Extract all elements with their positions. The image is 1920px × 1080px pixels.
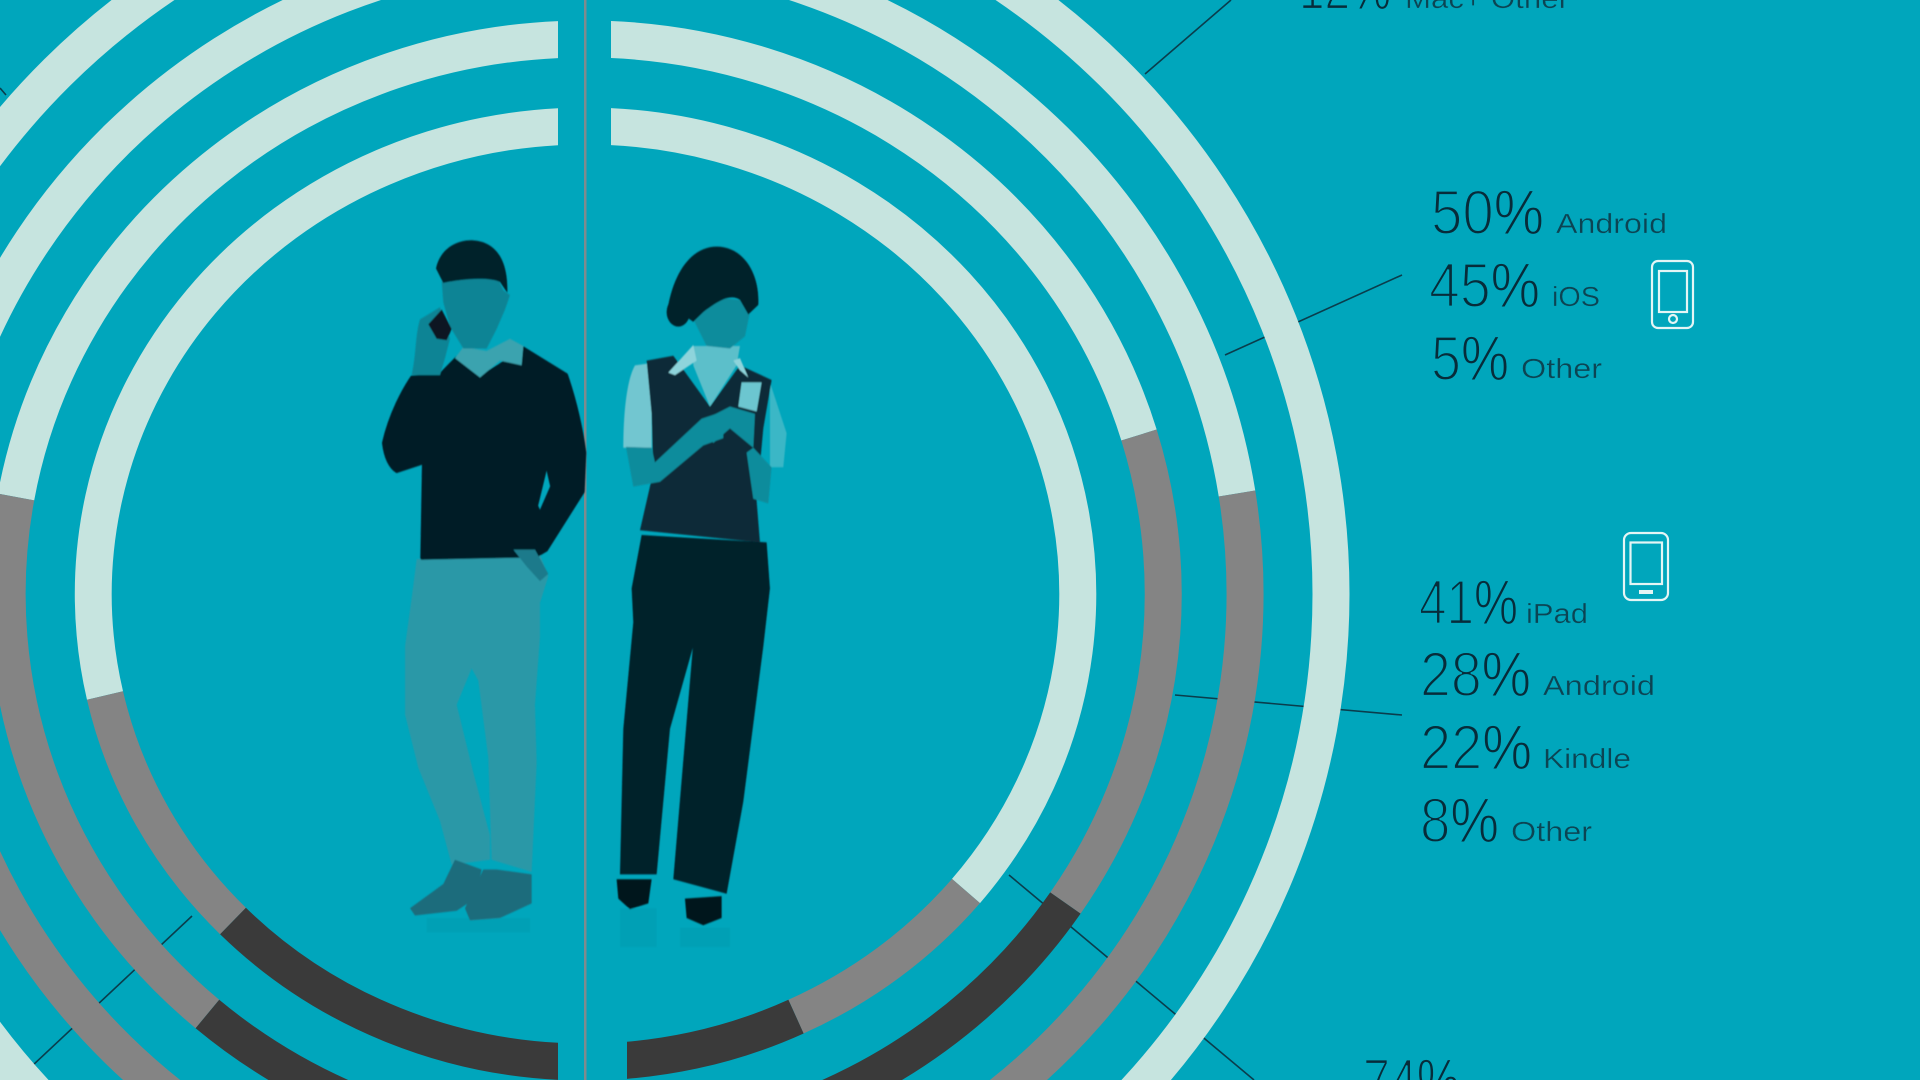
stat: iOS 45%: 45%	[1429, 251, 1540, 321]
stat: Kindle 22%: Kindle	[1543, 743, 1631, 774]
ring 1 left	[93, 126, 585, 1062]
man collar	[455, 339, 523, 378]
woman collar	[668, 345, 748, 378]
stat: Other 5%: 5%	[1431, 324, 1509, 394]
man jeans	[405, 554, 548, 872]
leader lines	[0, 0, 1402, 1080]
man shadow	[427, 918, 530, 933]
woman bun	[667, 298, 690, 327]
woman pants	[620, 535, 770, 894]
ring 4 left	[0, 0, 174, 1080]
stat: iPad 41%: 41%	[1419, 568, 1518, 638]
ring 3 left	[0, 0, 381, 1080]
ring 4 right	[996, 0, 1350, 1080]
stat: Android 50%: Android	[1556, 208, 1667, 239]
man hair	[436, 240, 507, 293]
stat: Other 8%: 8%	[1420, 786, 1499, 856]
stats: phones	[1429, 178, 1667, 394]
man phone	[428, 310, 452, 340]
ring 3 right	[789, 0, 1264, 1080]
figure: man on phone	[383, 240, 585, 933]
stat: Android 28%	[1420, 640, 1655, 710]
man face	[442, 276, 510, 348]
woman arms	[626, 411, 772, 504]
stat: iPad 41%: iPad	[1526, 598, 1588, 629]
stats: tablets	[1419, 568, 1655, 856]
ring 2 right	[585, 39, 1163, 1080]
stat: Android 50%	[1431, 178, 1667, 248]
woman chest	[693, 346, 740, 407]
woman face	[693, 298, 750, 348]
woman phone	[738, 382, 762, 411]
ring 1 right	[585, 126, 1078, 1062]
rings: right half	[585, 0, 1331, 1080]
icon: tablet	[1624, 533, 1668, 600]
figure: woman with phone	[617, 247, 787, 947]
stat: Android 50%: 50%	[1431, 178, 1544, 248]
stat: iOS 45%	[1429, 251, 1600, 321]
woman hair	[668, 247, 758, 322]
man raised hand	[412, 307, 450, 375]
woman vest	[640, 356, 772, 542]
man sweater	[383, 348, 585, 558]
ring 2 left	[7, 39, 585, 1080]
woman hands	[702, 407, 755, 448]
stat: laptop top	[1299, 0, 1569, 23]
woman shoes	[617, 879, 722, 925]
stat: iOS 45%: iOS	[1552, 281, 1600, 312]
man hand in pocket	[513, 550, 548, 581]
stat: Kindle 22%: 22%	[1420, 713, 1532, 783]
stat: Other 8%: Other	[1511, 816, 1592, 847]
icon: smartphone	[1652, 261, 1693, 328]
chart: concentric rings	[0, 0, 1331, 1080]
woman sleeves	[623, 363, 787, 467]
man shoes	[410, 860, 532, 920]
centre divider	[584, 0, 586, 1080]
woman reflection	[620, 908, 730, 947]
stat: Android 28%: Android	[1543, 670, 1655, 701]
stat: iPad 41%	[1419, 568, 1588, 638]
rings: left half	[0, 0, 585, 1080]
stat: Kindle 22%	[1420, 713, 1631, 783]
stat: Other 5%	[1431, 324, 1602, 394]
stat: Android 28%: 28%	[1420, 640, 1531, 710]
stat: Other 5%: Other	[1521, 353, 1602, 384]
stat: Other 8%	[1420, 786, 1592, 856]
